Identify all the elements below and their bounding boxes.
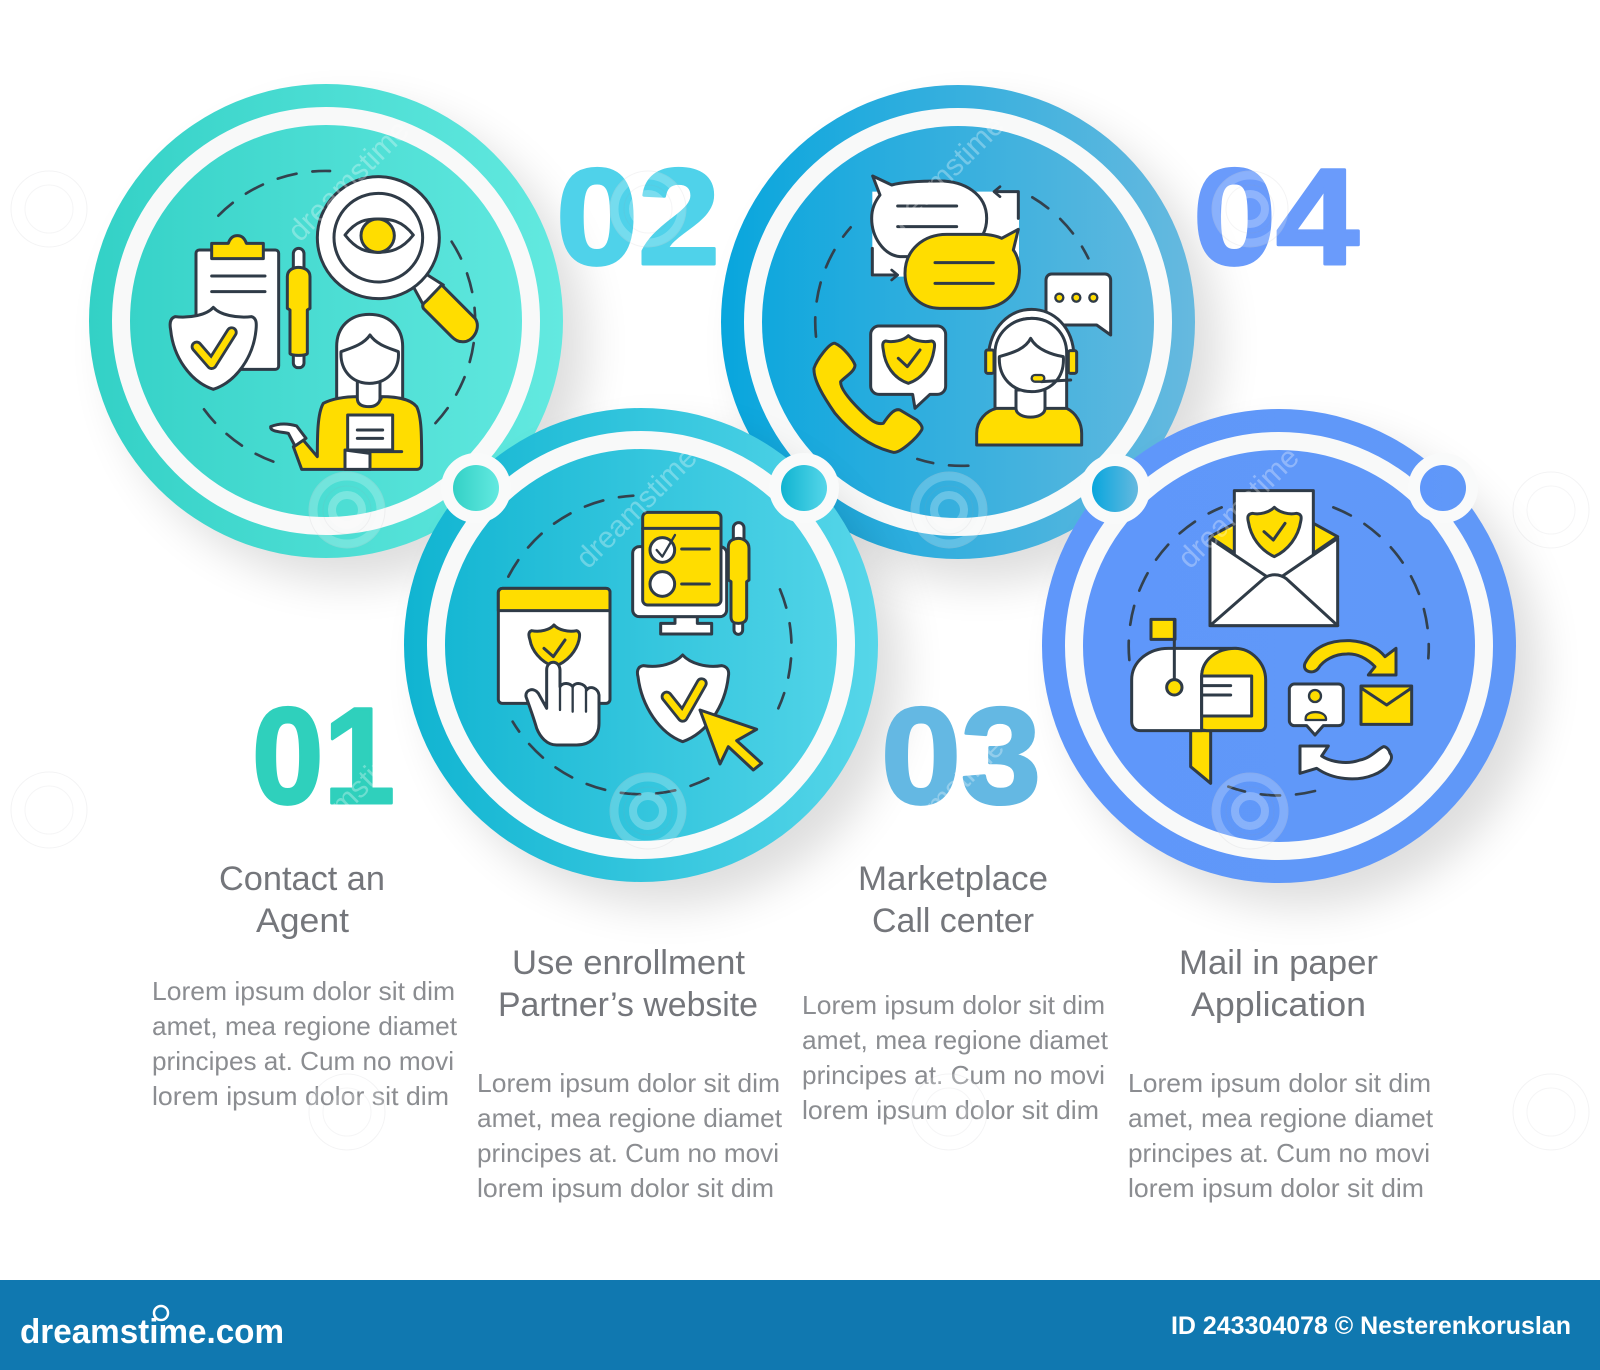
text block: step 2: principes at. Cum no movi xyxy=(477,1138,779,1168)
icon: website enrollment xyxy=(498,496,791,794)
footer logo: dreamstime.com xyxy=(20,1313,284,1351)
heading: step 3: Call center xyxy=(872,902,1034,940)
watermark overlay: dreamstime xyxy=(877,109,1011,243)
heading: step 4 xyxy=(1179,944,1378,1024)
heading: step 1: Agent xyxy=(256,902,350,940)
text block: step 3: Lorem ipsum dolor sit dim xyxy=(802,990,1105,1020)
footer credit: ID 243304078 © Nesterenkoruslan xyxy=(1171,1312,1571,1340)
watermark overlay: dreamstime xyxy=(282,731,416,865)
connector dot 3 xyxy=(1080,454,1150,524)
text block: step 4: lorem ipsum dolor sit dim xyxy=(1128,1173,1424,1203)
panel: step 2 circle xyxy=(404,408,902,906)
watermark overlay: dreamstime xyxy=(1172,441,1306,575)
number 03: 03 xyxy=(881,680,1041,833)
text block: step 2: lorem ipsum dolor sit dim xyxy=(477,1173,774,1203)
icon: mail and mailbox xyxy=(1129,491,1429,795)
text block: step 3: lorem ipsum dolor sit dim xyxy=(802,1095,1099,1125)
number 04: 04 xyxy=(1193,141,1359,294)
heading: step 4: Application xyxy=(1191,986,1366,1024)
heading: step 3 xyxy=(858,860,1048,940)
panel: step 4 circle xyxy=(1042,409,1540,907)
text block: step 4: amet, mea regione diamet xyxy=(1128,1103,1434,1133)
heading: step 3: Marketplace xyxy=(858,860,1048,898)
connector dot 1 xyxy=(441,453,511,523)
text block: step 1: amet, mea regione diamet xyxy=(152,1011,458,1041)
panel: step 3 circle xyxy=(721,85,1219,583)
text block: step 3: amet, mea regione diamet xyxy=(802,1025,1109,1055)
icon: call center chat and phone xyxy=(814,176,1111,466)
heading: step 1: Contact an xyxy=(219,860,385,898)
text block: step 4: principes at. Cum no movi xyxy=(1128,1138,1430,1168)
text block: step 2: Lorem ipsum dolor sit dim xyxy=(477,1068,780,1098)
text block: step 1: lorem ipsum dolor sit dim xyxy=(152,1081,449,1111)
text block: step 1: Lorem ipsum dolor sit dim xyxy=(152,976,455,1006)
text block: step 1: principes at. Cum no movi xyxy=(152,1046,454,1076)
watermark overlay: dreamstime xyxy=(877,731,1011,865)
connector dot 4 xyxy=(1408,453,1478,523)
text block: step 2: amet, mea regione diamet xyxy=(477,1103,783,1133)
icon: agent with clipboard and magnifier xyxy=(170,171,477,469)
heading: step 4: Mail in paper xyxy=(1179,944,1378,982)
text block: step 4: Lorem ipsum dolor sit dim xyxy=(1128,1068,1431,1098)
text block: step 2 xyxy=(477,1068,783,1203)
text block: step 1 xyxy=(152,976,458,1111)
text block: step 3 xyxy=(802,990,1109,1125)
heading: step 1 xyxy=(219,860,385,940)
connector dot 2 xyxy=(769,453,839,523)
number 02: 02 xyxy=(556,141,720,294)
footer bar xyxy=(0,1280,1600,1370)
number 01: 01 xyxy=(252,680,395,833)
watermark overlay xyxy=(11,109,1589,1150)
heading: step 2: Use enrollment xyxy=(512,944,746,982)
watermark overlay: dreamstime xyxy=(282,114,416,248)
text block: step 3: principes at. Cum no movi xyxy=(802,1060,1105,1090)
watermark overlay: dreamstime xyxy=(570,441,704,575)
heading: step 2 xyxy=(498,944,758,1024)
text block: step 4 xyxy=(1128,1068,1434,1203)
panel: step 1 circle xyxy=(89,84,587,582)
heading: step 2: Partner’s website xyxy=(498,986,758,1024)
